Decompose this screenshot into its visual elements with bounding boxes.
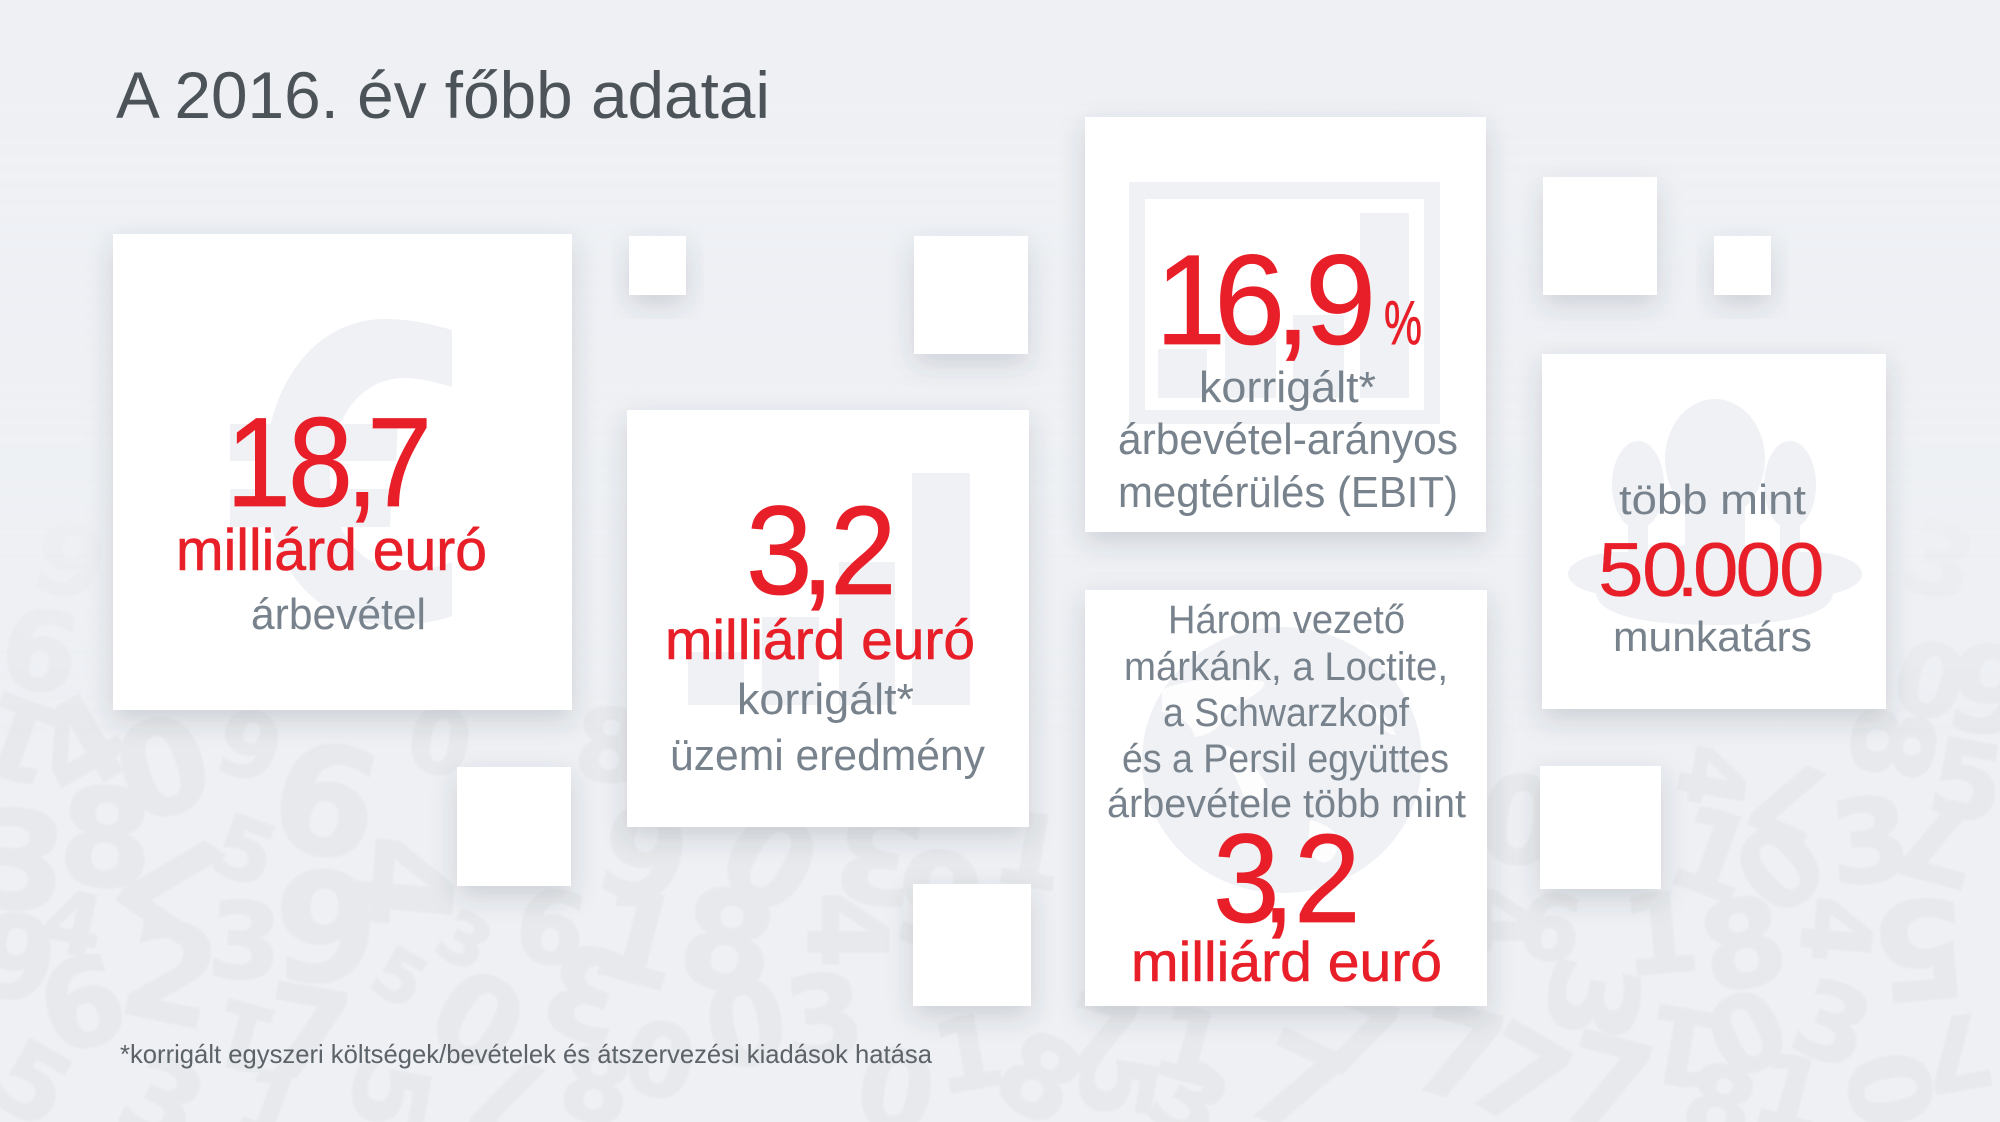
background pattern: scattered digits: 4 [320, 829, 484, 936]
background pattern: scattered digits: 7 [1299, 965, 1414, 1112]
EBIT margin label: korrigált* [1199, 363, 1376, 412]
background pattern: scattered digits: 6 [506, 865, 595, 992]
employees intro: több mint [1619, 476, 1806, 523]
brands description: Három vezető [1168, 598, 1405, 642]
decorative square: top left small [629, 236, 686, 295]
operating result label: üzemi eredmény [670, 731, 985, 780]
background pattern: scattered digits: 9 [21, 496, 118, 627]
background pattern: scattered digits: 8 [668, 857, 788, 1028]
background pattern: scattered digits: 0 [1711, 795, 1851, 942]
background pattern: scattered digits: 0 [97, 682, 230, 855]
icon: bar chart watermark [688, 473, 970, 705]
decorative square: top right small [1714, 236, 1771, 295]
background pattern: scattered digits: 4 [782, 892, 910, 968]
background pattern: scattered digits: 0 [406, 941, 548, 1103]
background pattern: scattered digits: 4 [1777, 892, 1892, 968]
panel: revenue [113, 234, 572, 710]
operating result label: korrigált* [737, 675, 914, 724]
background pattern: scattered digits: 3 [205, 879, 285, 1005]
background pattern: scattered digits: 1 [1652, 779, 1773, 932]
background pattern: scattered digits: 7 [1912, 988, 2000, 1115]
EBIT margin value: 16,9 [1155, 229, 1376, 372]
background fade toward top [0, 0, 2000, 740]
background pattern: scattered digits: 3 [523, 908, 655, 1074]
brands description: márkánk, a Loctite, [1124, 645, 1448, 689]
background pattern: scattered digits: 0 [400, 681, 480, 795]
background pattern: scattered digits: 0 [695, 778, 843, 947]
revenue value: 18,7 [226, 392, 432, 533]
icon: euro watermark [230, 319, 452, 625]
background pattern: scattered digits: 8 [1822, 694, 1961, 792]
brands description: és a Persil együttes [1122, 737, 1449, 781]
background pattern: scattered digits: 0 [1881, 616, 1978, 747]
decorative square: top middle [914, 236, 1028, 354]
EBIT margin label [1118, 363, 1458, 517]
background pattern: scattered digits: 2 [108, 889, 233, 1062]
decorative square: top right large [1543, 177, 1657, 295]
revenue unit: milliárd euró [176, 518, 487, 583]
background pattern: scattered digits: 7 [1048, 970, 1151, 1107]
employees value: 50.000 [1598, 527, 1825, 612]
background pattern: scattered digits: 3 [1777, 955, 1888, 1095]
decorative square: below employees panel [1540, 766, 1661, 889]
background pattern: scattered digits: 5 [358, 930, 441, 1026]
background pattern: scattered digits: 3 [1515, 946, 1666, 1053]
background pattern: scattered digits: 9 [206, 688, 293, 806]
background pattern: scattered digits: 0 [695, 952, 797, 1098]
operating result unit: milliárd euró [665, 608, 975, 671]
background pattern: scattered digits: 8 [1688, 869, 1799, 1022]
panel: employees [1542, 354, 1886, 709]
icon: framed bar chart watermark [1129, 182, 1440, 424]
background pattern: scattered digits: 1 [1637, 979, 1730, 1112]
background pattern: scattered digits: 3 [1891, 496, 1988, 627]
background pattern: scattered digits: 4 [1654, 737, 1768, 817]
background pattern: scattered digits: 9 [271, 841, 381, 1019]
percent sign: % [1384, 289, 1422, 358]
background pattern: scattered digits: 6 [256, 707, 395, 899]
background pattern: scattered digits: 7 [1885, 763, 1997, 913]
background pattern: scattered digits: 4 [33, 870, 112, 980]
background pattern: scattered digits: 0 [615, 998, 704, 1122]
revenue label: árbevétel [251, 590, 426, 639]
icon: globe watermark [1142, 627, 1422, 893]
background pattern: scattered digits: 3 [423, 893, 506, 989]
panel: top brands [1085, 590, 1487, 1006]
background pattern: scattered digits: 3 [823, 776, 934, 933]
brands description [1107, 598, 1466, 826]
decorative square: below operating result panel [913, 884, 1031, 1006]
EBIT margin label: árbevétel-arányos [1118, 415, 1458, 464]
panel: adjusted EBIT margin [1085, 117, 1486, 532]
background pattern: scattered digits: 5 [945, 891, 1046, 1032]
operating result value: 3,2 [746, 481, 897, 622]
background pattern: scattered digits: 6 [584, 769, 705, 932]
background pattern: scattered digits: 1 [577, 858, 698, 1021]
title: A 2016. év főbb adatai [116, 58, 770, 132]
background pattern: scattered digits: 6 [24, 928, 141, 1084]
brands description: a Schwarzkopf [1163, 691, 1410, 735]
background pattern: scattered digits: 1 [1141, 981, 1238, 1112]
background pattern: scattered digits: 8 [570, 685, 650, 808]
background pattern: scattered digits: 1 [202, 976, 289, 1094]
background pattern: scattered digits: 0 [1689, 964, 1807, 1105]
background pattern: scattered digits: 7 [250, 957, 361, 1114]
background pattern: scattered digits: 6 [1510, 872, 1590, 986]
brands value: 3,2 [1213, 809, 1361, 950]
background pattern: scattered digits: 3 [1825, 772, 1916, 913]
background pattern: scattered digits: 7 [1732, 728, 1850, 869]
footnote: *korrigált egyszeri költségek/bevételek és átszervezési kiadások hatása [120, 1039, 933, 1069]
background pattern: scattered digits: 8 [55, 758, 157, 920]
background pattern: scattered digits: 3 [779, 949, 870, 1090]
background pattern: scattered digits: 5 [1866, 866, 1973, 1030]
background pattern: scattered digits: 7 [93, 787, 260, 970]
operating result label [670, 675, 985, 780]
background pattern: scattered digits: 4 [1440, 885, 1557, 955]
employees label: munkatárs [1613, 613, 1812, 660]
background pattern: scattered digits: 1 [924, 991, 1013, 1118]
background pattern: scattered digits: 5 [200, 795, 289, 909]
decorative square: below revenue panel [457, 767, 571, 886]
panel: adjusted operating result [627, 410, 1029, 827]
background pattern: scattered digits: 1 [985, 788, 1074, 915]
brands unit: milliárd euró [1131, 930, 1442, 993]
background pattern: scattered digits: 9 [882, 819, 997, 984]
icon: people watermark [1568, 399, 1862, 625]
background pattern: scattered digits: 0 [1469, 748, 1571, 897]
background pattern: scattered digits [0, 496, 2000, 1122]
EBIT margin label: megtérülés (EBIT) [1118, 468, 1458, 517]
background pattern: scattered digits: 1 [1616, 868, 1704, 1002]
brands description: árbevétele több mint [1107, 782, 1466, 826]
background pattern: scattered digits: 4 [10, 666, 152, 828]
